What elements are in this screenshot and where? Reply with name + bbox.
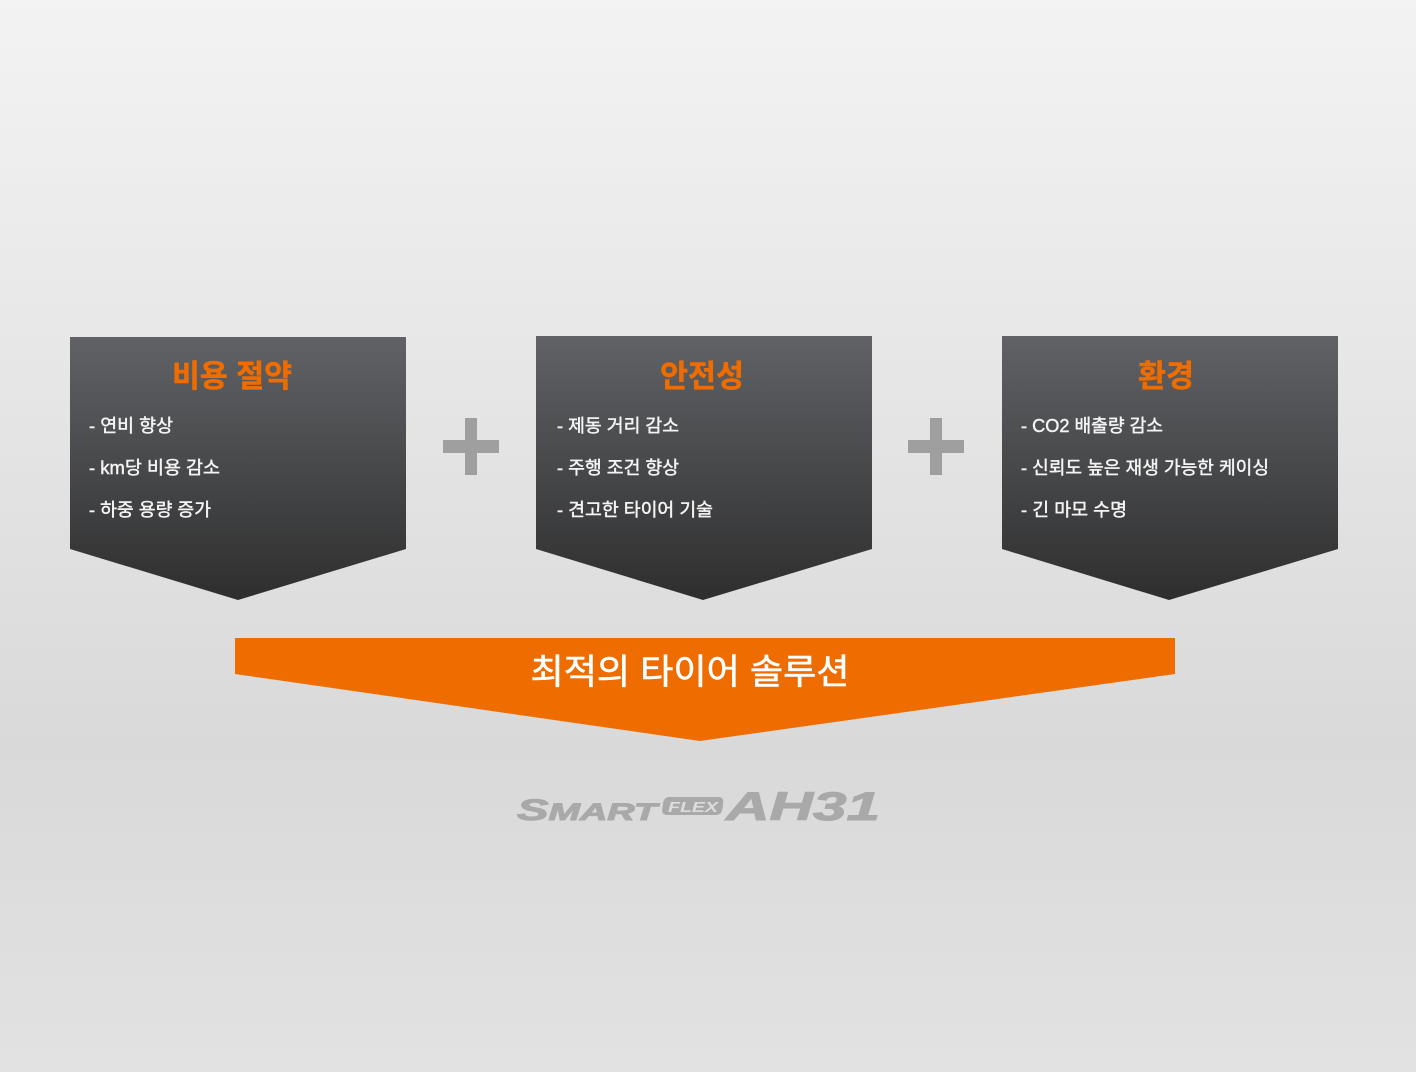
banner text: 최적의 타이어 솔루션 [530, 653, 850, 692]
logo: Smart Flex AH31 [517, 785, 880, 829]
panel shape: safety [536, 336, 872, 600]
panel: cost saving [70, 337, 406, 600]
list item: load capacity: - 하중 용량 증가 [89, 500, 211, 520]
heading: environment: 환경 [1138, 359, 1194, 394]
panel: environment [1002, 336, 1338, 600]
list item: cost per km: - km당 비용 감소 [89, 458, 220, 478]
icon: plus 1 [443, 418, 499, 475]
logo badge: Flex [661, 797, 724, 816]
heading: safety: 안전성 [660, 359, 744, 394]
banner arrow [235, 638, 1175, 741]
logo word: AH31: AH31 [724, 785, 880, 829]
logo word: Smart: S MART [517, 794, 661, 827]
list item: driving conditions: - 주행 조건 향상 [557, 458, 679, 478]
logo badge: Flex: FLEX [668, 799, 719, 816]
list item: tread life: - 긴 마모 수명 [1021, 500, 1127, 520]
panel: safety [536, 336, 872, 600]
panel shape: cost saving [70, 337, 406, 600]
banner: optimal tire solution [235, 638, 1175, 741]
list item: tire technology: - 견고한 타이어 기술 [557, 500, 713, 520]
list item: braking distance: - 제동 거리 감소 [557, 416, 679, 436]
heading: cost saving: 비용 절약 [172, 359, 292, 394]
list item: fuel economy: - 연비 향상 [89, 416, 173, 436]
icon: plus 2 [908, 418, 964, 475]
list item: CO2: - CO2 배출량 감소 [1021, 416, 1163, 436]
panel shape: environment [1002, 336, 1338, 600]
list item: casing: - 신뢰도 높은 재생 가능한 케이싱 [1021, 458, 1269, 478]
